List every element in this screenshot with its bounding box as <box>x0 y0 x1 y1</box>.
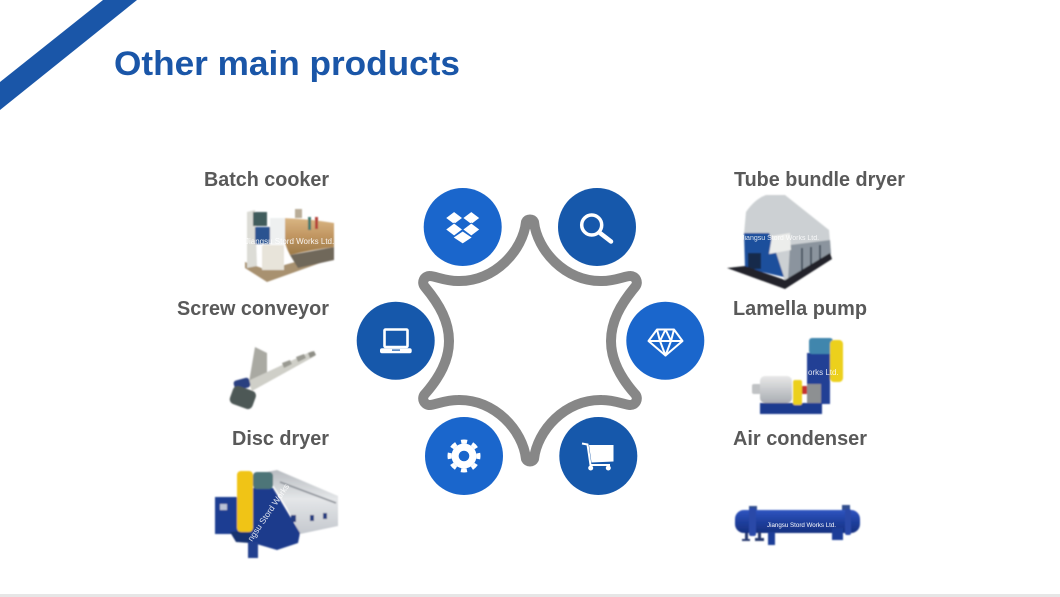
label: Disc dryer: Disc dryer <box>232 428 329 450</box>
product image: Lamella pump <box>752 338 843 414</box>
icon: magnifier circle <box>558 188 636 266</box>
product image: Air condenser <box>735 505 860 545</box>
label: Lamella pump: Lamella pump <box>733 298 867 320</box>
product image: Disc dryer <box>215 470 338 558</box>
icon: gear circle <box>425 417 503 495</box>
icon: laptop circle <box>357 302 435 380</box>
bottom rule <box>0 594 1060 597</box>
product image: Disc dryer: ngsu Stord Works <box>245 482 291 543</box>
product image: Screw conveyor <box>228 347 316 411</box>
product image: Tube bundle dryer <box>727 195 832 289</box>
product image: Air condenser: Jiangsu Stord Works Ltd. <box>767 522 836 529</box>
product image: Lamella pump: orks Ltd. <box>808 368 839 377</box>
product image: Batch cooker: Jiangsu Stord Works Ltd. <box>245 237 334 246</box>
title: Other main products <box>114 45 460 83</box>
diagonal corner band <box>0 0 137 110</box>
icon: gem circle <box>626 302 704 380</box>
central six-point star outline <box>423 220 637 461</box>
product image: Batch cooker <box>245 209 334 282</box>
icon: shopping cart circle <box>559 417 637 495</box>
icon: dropbox circle <box>424 188 502 266</box>
product image: Tube bundle dryer: Jiangsu Stord Works Ltd. <box>741 235 819 242</box>
label: Tube bundle dryer: Tube bundle dryer <box>734 169 905 191</box>
label: Screw conveyor: Screw conveyor <box>177 298 329 320</box>
label: Batch cooker: Batch cooker <box>204 169 329 191</box>
label: Air condenser: Air condenser <box>733 428 867 450</box>
